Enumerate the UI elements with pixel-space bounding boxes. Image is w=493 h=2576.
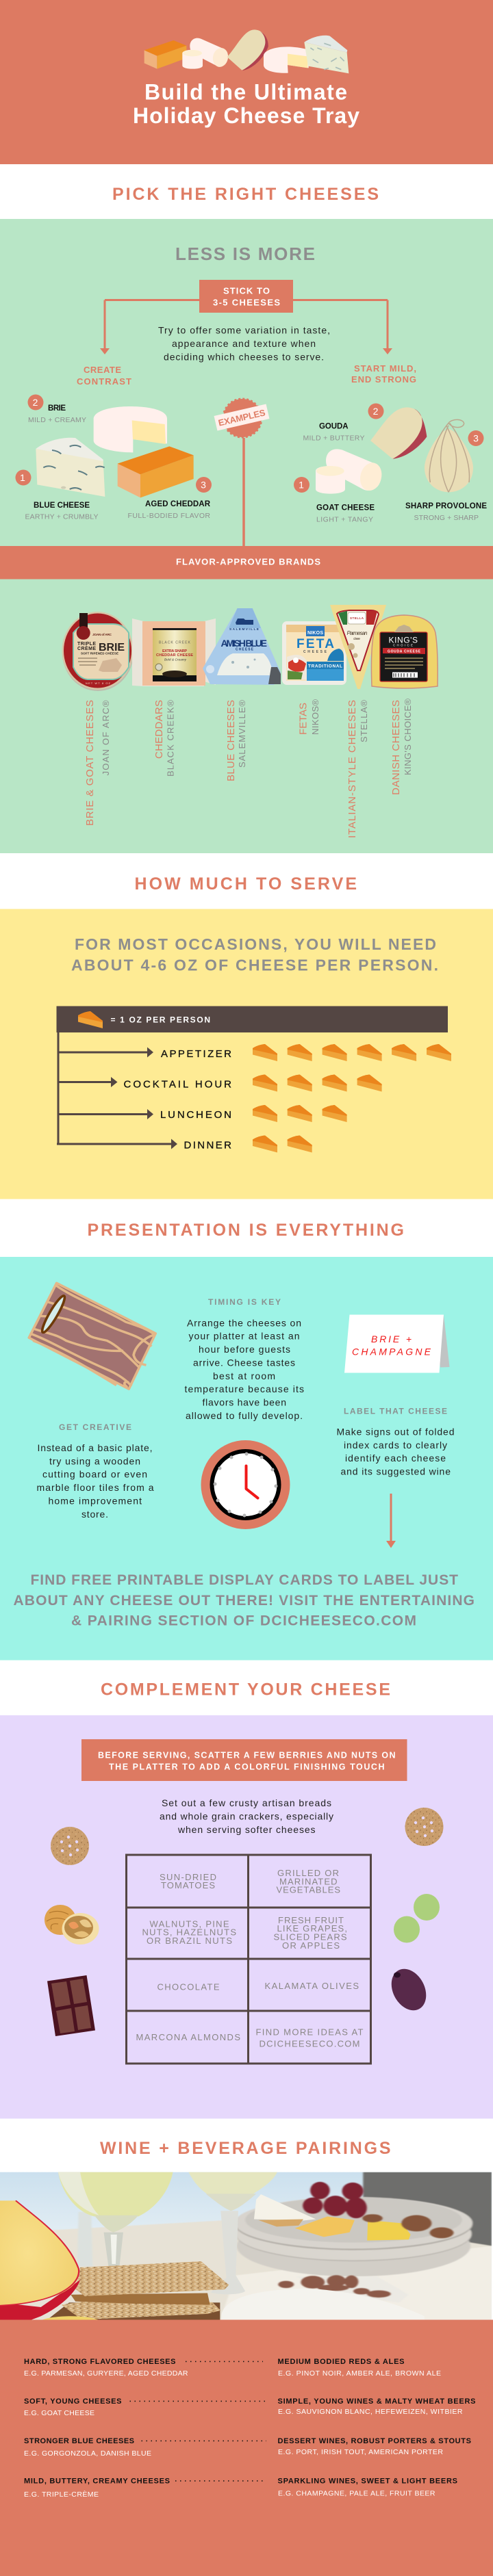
text: timing is key: arrive. Cheese tastes	[193, 1357, 295, 1368]
chart: legend bar: = 1 OZ PER PERSON	[111, 1015, 210, 1025]
product: king's choice gouda: KING'S	[389, 635, 418, 645]
product: stella parmesan	[330, 605, 386, 689]
badge 2	[368, 404, 383, 419]
table: pairings ideas: VEGETABLES	[277, 1884, 340, 1895]
label: aged cheddar: AGED CHEDDAR	[145, 500, 211, 508]
panel: how much to serve	[0, 909, 493, 1199]
pairing: soft cheeses: SOFT, YOUNG CHEESES	[24, 2397, 122, 2406]
label: sharp provolone: SHARP PROVOLONE	[405, 502, 487, 510]
heading: create contrast: CREATE	[84, 365, 121, 375]
panel: presentation	[0, 1257, 493, 1660]
heading: complement your cheese: COMPLEMENT YOUR CHEESE	[101, 1680, 390, 1700]
text: get creative: cutting board or even	[42, 1468, 147, 1479]
row: luncheon	[160, 1105, 347, 1122]
badge: examples: EXAMPLES	[217, 407, 266, 428]
text: get creative: Instead of a basic plate,	[37, 1442, 152, 1453]
table: pairings ideas: FRESH FRUIT	[278, 1915, 344, 1925]
icon: blue cheese	[36, 438, 105, 497]
text: label that cheese: and its suggested wine	[341, 1466, 451, 1476]
product: stella parmesan: Cheese	[353, 637, 360, 640]
table: pairings ideas: GRILLED OR	[277, 1868, 339, 1878]
pairing: hard cheeses: HARD, STRONG FLAVORED CHEESES	[24, 2358, 175, 2366]
badge 3: 3	[473, 432, 479, 443]
table: pairings ideas: MARINATED	[279, 1876, 337, 1887]
text: printable cards: ABOUT ANY CHEESE OUT THERE! VISIT THE ENTERTAINING	[14, 1593, 475, 1609]
heading: start mild end strong: END STRONG	[351, 374, 416, 385]
badge 2: 2	[373, 406, 379, 417]
pairing: blue cheeses	[24, 2437, 471, 2458]
title: Build the Ultimate	[144, 79, 347, 104]
text: breads and crackers: Set out a few crusty artisan breads	[162, 1797, 331, 1808]
product: stella parmesan: Parmesan	[346, 630, 368, 636]
text: timing is key: temperature because its	[185, 1383, 304, 1394]
label: aged cheddar: FULL-BODIED FLAVOR	[127, 512, 210, 520]
brand labels: BLUE CHEESES	[225, 700, 237, 781]
badge 3	[468, 430, 483, 446]
pairing: creamy cheeses: E.G. TRIPLE-CRÈME	[24, 2490, 99, 2499]
label: blue cheese: BLUE CHEESE	[34, 502, 90, 510]
heading: create contrast	[77, 365, 131, 387]
table: pairings ideas: KALAMATA OLIVES	[264, 1981, 359, 1991]
group: mild to strong cheeses	[294, 404, 487, 524]
text: timing is key: flavors have been	[203, 1397, 286, 1408]
icon: folded card: CHAMPAGNE	[352, 1346, 431, 1357]
label: brie	[28, 404, 86, 424]
product: stella parmesan: STELLA	[350, 616, 364, 620]
pairing: hard cheeses: E.G. PARMESAN, GURYERE, AGED CHEDDAR	[24, 2369, 188, 2378]
badge: examples	[214, 399, 269, 546]
arrow: to printable cards	[386, 1494, 396, 1548]
text: get creative: home improvement	[48, 1496, 142, 1507]
product: joan of arc brie: TRIPLE	[77, 642, 96, 647]
text: get creative: GET CREATIVE	[59, 1422, 131, 1432]
brand labels: DANISH CHEESES	[390, 700, 402, 795]
text: timing is key: your platter at least an	[189, 1330, 300, 1341]
icon: walnuts	[45, 1905, 99, 1944]
product: black creek cheddar	[132, 619, 216, 686]
text: breads and crackers: when serving softer cheeses	[177, 1824, 315, 1835]
pairing: blue cheeses: STRONGER BLUE CHEESES	[24, 2437, 134, 2445]
row: luncheon: LUNCHEON	[160, 1109, 231, 1121]
icon: goat cheese	[316, 449, 385, 494]
label: blue cheese	[25, 502, 99, 521]
brand labels: JOAN OF ARC®	[101, 700, 111, 776]
product: joan of arc brie: NET WT 8 OZ	[86, 681, 111, 685]
pairing: soft cheeses: E.G. GOAT CHEESE	[24, 2409, 94, 2417]
heading: pick the right cheeses: PICK THE RIGHT CHEESES	[112, 185, 379, 204]
text: timing is key: allowed to fully develop.	[186, 1410, 303, 1421]
icon: aged cheddar	[118, 446, 194, 497]
panel: complement	[0, 1715, 493, 2118]
label: goat cheese: GOAT CHEESE	[316, 504, 375, 512]
table: pairings ideas: WALNUTS, PINE	[149, 1918, 229, 1929]
product: black creek cheddar: Bold & Creamy	[164, 658, 187, 661]
label: gouda	[303, 423, 364, 442]
table: pairings ideas: FIND MORE IDEAS AT	[256, 2027, 364, 2038]
icon: grapes	[394, 1894, 440, 1943]
table: pairings ideas: OR BRAZIL NUTS	[147, 1936, 232, 1946]
callout: stick to 3-5 cheeses: 3-5 CHEESES	[213, 297, 280, 308]
pairing: blue cheeses: DESSERT WINES, ROBUST PORTERS & STOUTS	[278, 2437, 471, 2445]
pairing: creamy cheeses: E.G. CHAMPAGNE, PALE ALE, FRUIT BEER	[278, 2489, 435, 2497]
brand labels: SALEMVILLE®	[237, 700, 247, 768]
label: goat cheese	[316, 504, 375, 524]
text: printable cards: FIND FREE PRINTABLE DISPLAY CARDS TO LABEL JUST	[30, 1572, 458, 1588]
icon: cracker left	[51, 1827, 89, 1865]
group: contrast cheeses	[15, 394, 212, 521]
text: label that cheese	[337, 1407, 455, 1476]
brand labels: BLACK CREEK®	[166, 700, 175, 777]
callout: stick to 3-5 cheeses	[199, 280, 293, 313]
text: breads and crackers: and whole grain crackers, especially	[160, 1810, 333, 1821]
product: nikos feta: CHEESE	[303, 650, 327, 654]
pairing: soft cheeses	[24, 2397, 475, 2417]
product: nikos feta: TRADITIONAL	[308, 664, 342, 669]
icon: clock	[201, 1440, 290, 1529]
product: joan of arc brie	[62, 612, 134, 691]
product: joan of arc brie: BRIE	[99, 642, 125, 653]
band: flavor-approved brands	[0, 546, 493, 579]
text: ounces per person: ABOUT 4-6 OZ OF CHEESE PER PERSON.	[71, 957, 438, 974]
brand labels: NIKOS®	[310, 699, 320, 735]
badge 1	[15, 469, 31, 486]
label: goat cheese: LIGHT + TANGY	[316, 516, 373, 524]
title	[133, 79, 359, 128]
badge 3	[196, 477, 212, 493]
callout: finishing touch	[81, 1739, 407, 1781]
table: pairings ideas: OR APPLES	[282, 1940, 340, 1951]
product: salemville amish blue: SALEMVILLE	[229, 627, 260, 632]
brand labels: ITALIAN-STYLE CHEESES	[346, 700, 358, 838]
panel: pairing list	[0, 2319, 493, 2576]
panel: less is more	[0, 219, 493, 853]
table: pairings ideas	[126, 1855, 371, 2064]
product: joan of arc brie: CRÈME	[77, 645, 96, 651]
icon: gouda	[370, 407, 427, 459]
chart: legend bar	[56, 1006, 448, 1032]
badge 2: 2	[33, 397, 38, 408]
text: timing is key: TIMING IS KEY	[208, 1297, 281, 1307]
text: label that cheese: Make signs out of folded	[337, 1426, 455, 1437]
product: salemville amish blue: AMISH BLUE	[220, 638, 267, 649]
chart: serving arrows	[57, 1032, 177, 1149]
text: variation advice: deciding which cheeses to serve.	[164, 352, 324, 363]
heading: start mild end strong	[351, 363, 416, 385]
callout: finishing touch: THE PLATTER TO ADD A COLORFUL FINISHING TOUCH	[109, 1762, 385, 1772]
badge 1	[294, 477, 309, 493]
pairing: creamy cheeses: MILD, BUTTERY, CREAMY CHEESES	[24, 2477, 170, 2485]
text: get creative: try using a wooden	[49, 1456, 140, 1467]
table: pairings ideas: CHOCOLATE	[157, 1981, 220, 1992]
text: printable cards	[14, 1572, 475, 1628]
flow arrows	[100, 300, 392, 354]
callout: finishing touch: BEFORE SERVING, SCATTER A FEW BERRIES AND NUTS ON	[98, 1750, 396, 1760]
table: pairings ideas: LIKE GRAPES,	[277, 1923, 347, 1934]
label: blue cheese: EARTHY + CRUMBLY	[25, 513, 99, 521]
badge 2	[27, 394, 44, 411]
pairing: soft cheeses: E.G. SAUVIGNON BLANC, HEFEWEIZEN, WITBIER	[278, 2408, 463, 2416]
heading: presentation is everything: PRESENTATION IS EVERYTHING	[88, 1221, 404, 1240]
pairing: blue cheeses: E.G. GORGONZOLA, DANISH BLUE	[24, 2449, 151, 2458]
heading: wine + beverage pairings: WINE + BEVERAGE PAIRINGS	[100, 2139, 390, 2158]
pairing: hard cheeses: MEDIUM BODIED REDS & ALES	[278, 2358, 404, 2366]
subheading: less is more: LESS IS MORE	[175, 244, 315, 264]
text: timing is key: hour before guests	[199, 1344, 290, 1355]
product: salemville amish blue: CHEESE	[236, 647, 254, 651]
pairing: soft cheeses: SIMPLE, YOUNG WINES & MALTY WHEAT BEERS	[278, 2397, 475, 2406]
label: aged cheddar	[127, 500, 211, 520]
text: variation advice	[158, 324, 330, 363]
product: black creek cheddar: BLACK CREEK	[159, 640, 191, 645]
product: king's choice gouda	[371, 615, 438, 688]
row: appetizer: APPETIZER	[161, 1048, 231, 1060]
text: ounces per person	[71, 935, 438, 974]
product: nikos feta: FETA	[296, 637, 334, 651]
text: variation advice: Try to offer some variation in taste,	[158, 324, 330, 335]
band: flavor-approved brands: FLAVOR-APPROVED BRANDS	[176, 557, 320, 567]
text: printable cards: & PAIRING SECTION OF DCICHEESECO.COM	[71, 1613, 416, 1628]
brand labels: KING'S CHOICE®	[403, 699, 413, 775]
text: breads and crackers	[160, 1797, 333, 1835]
table: pairings ideas: SLICED PEARS	[274, 1932, 347, 1942]
label: brie: MILD + CREAMY	[28, 416, 86, 424]
brand labels: STELLA®	[359, 700, 369, 742]
photo: wine and cheese spread	[0, 2172, 492, 2320]
badge 1: 1	[299, 479, 304, 490]
brand labels: BRIE & GOAT CHEESES	[84, 700, 96, 826]
brand labels	[84, 699, 413, 838]
text: timing is key: Arrange the cheeses on	[187, 1318, 301, 1329]
product: joan of arc brie: JOAN of ARC	[92, 633, 112, 637]
pairing: creamy cheeses: SPARKLING WINES, SWEET & LIGHT BEERS	[278, 2477, 457, 2485]
icon: chocolate	[47, 1975, 95, 2036]
text: label that cheese: identify each cheese	[345, 1453, 446, 1463]
product: joan of arc brie: SOFT RIPENED CHEESE	[81, 651, 118, 655]
callout: stick to 3-5 cheeses: STICK TO	[223, 286, 270, 296]
label: gouda: GOUDA	[319, 423, 348, 431]
heading: start mild end strong: START MILD,	[354, 363, 416, 374]
product: black creek cheddar: CHEDDAR CHEESE	[156, 653, 193, 658]
row: dinner	[184, 1136, 312, 1152]
product: nikos feta: NIKOS	[307, 631, 323, 636]
pairing: blue cheeses: E.G. PORT, IRISH TOUT, AMERICAN PORTER	[278, 2448, 443, 2456]
text: timing is key	[185, 1297, 304, 1421]
label: sharp provolone: STRONG + SHARP	[414, 514, 479, 522]
text: get creative	[37, 1422, 154, 1520]
icon: folded card	[344, 1315, 449, 1372]
text: label that cheese: index cards to clearly	[344, 1440, 447, 1450]
label: gouda: MILD + BUTTERY	[303, 434, 364, 442]
row: appetizer	[161, 1044, 451, 1061]
heading: create contrast: CONTRAST	[77, 376, 131, 387]
pairing: hard cheeses: E.G. PINOT NOIR, AMBER ALE, BROWN ALE	[278, 2369, 441, 2378]
product: king's choice gouda: CHOICE	[393, 643, 413, 647]
row: cocktail hour: COCKTAIL HOUR	[123, 1078, 231, 1091]
table: pairings ideas: MARCONA ALMONDS	[136, 2032, 240, 2042]
label: sharp provolone	[405, 502, 487, 522]
row: cocktail hour	[123, 1074, 382, 1092]
text: get creative: marble floor tiles from a	[37, 1482, 154, 1493]
text: get creative: store.	[81, 1509, 108, 1520]
icon: provolone	[425, 419, 473, 492]
pairing: creamy cheeses	[24, 2477, 457, 2499]
icon: folded card: BRIE +	[371, 1333, 412, 1344]
panel: header	[0, 0, 493, 164]
badge 1: 1	[20, 472, 25, 483]
table: pairings ideas: NUTS, HAZELNUTS	[142, 1927, 236, 1938]
pairing: hard cheeses	[24, 2358, 441, 2378]
icon: olive	[385, 1963, 433, 2016]
text: variation advice: appearance and texture when	[172, 338, 316, 349]
table: pairings ideas: DCICHEESECO.COM	[259, 2039, 360, 2048]
title: Holiday Cheese Tray	[133, 103, 359, 128]
label: brie: BRIE	[48, 404, 66, 413]
text: ounces per person: FOR MOST OCCASIONS, YOU WILL NEED	[75, 935, 436, 953]
text: timing is key: best at room	[213, 1370, 275, 1381]
text: label that cheese: LABEL THAT CHEESE	[344, 1407, 447, 1416]
brand labels: CHEDDARS	[153, 700, 165, 759]
icon: cracker right	[405, 1808, 444, 1846]
heading: how much to serve: HOW MUCH TO SERVE	[134, 874, 357, 894]
product: nikos feta	[282, 621, 346, 685]
product: black creek cheddar: EXTRA SHARP	[162, 649, 187, 653]
icon: row of cheeses	[144, 29, 349, 73]
badge 3: 3	[201, 479, 206, 490]
brand labels: FETAS	[297, 703, 309, 735]
row: dinner: DINNER	[184, 1140, 231, 1151]
product: king's choice gouda: GOUDA CHEESE	[388, 650, 421, 654]
table: pairings ideas: TOMATOES	[161, 1880, 215, 1890]
table: pairings ideas: SUN-DRIED	[160, 1872, 216, 1882]
product: salemville amish blue	[203, 608, 281, 685]
icon: brie	[94, 406, 167, 452]
icon: cutting board	[29, 1283, 155, 1389]
